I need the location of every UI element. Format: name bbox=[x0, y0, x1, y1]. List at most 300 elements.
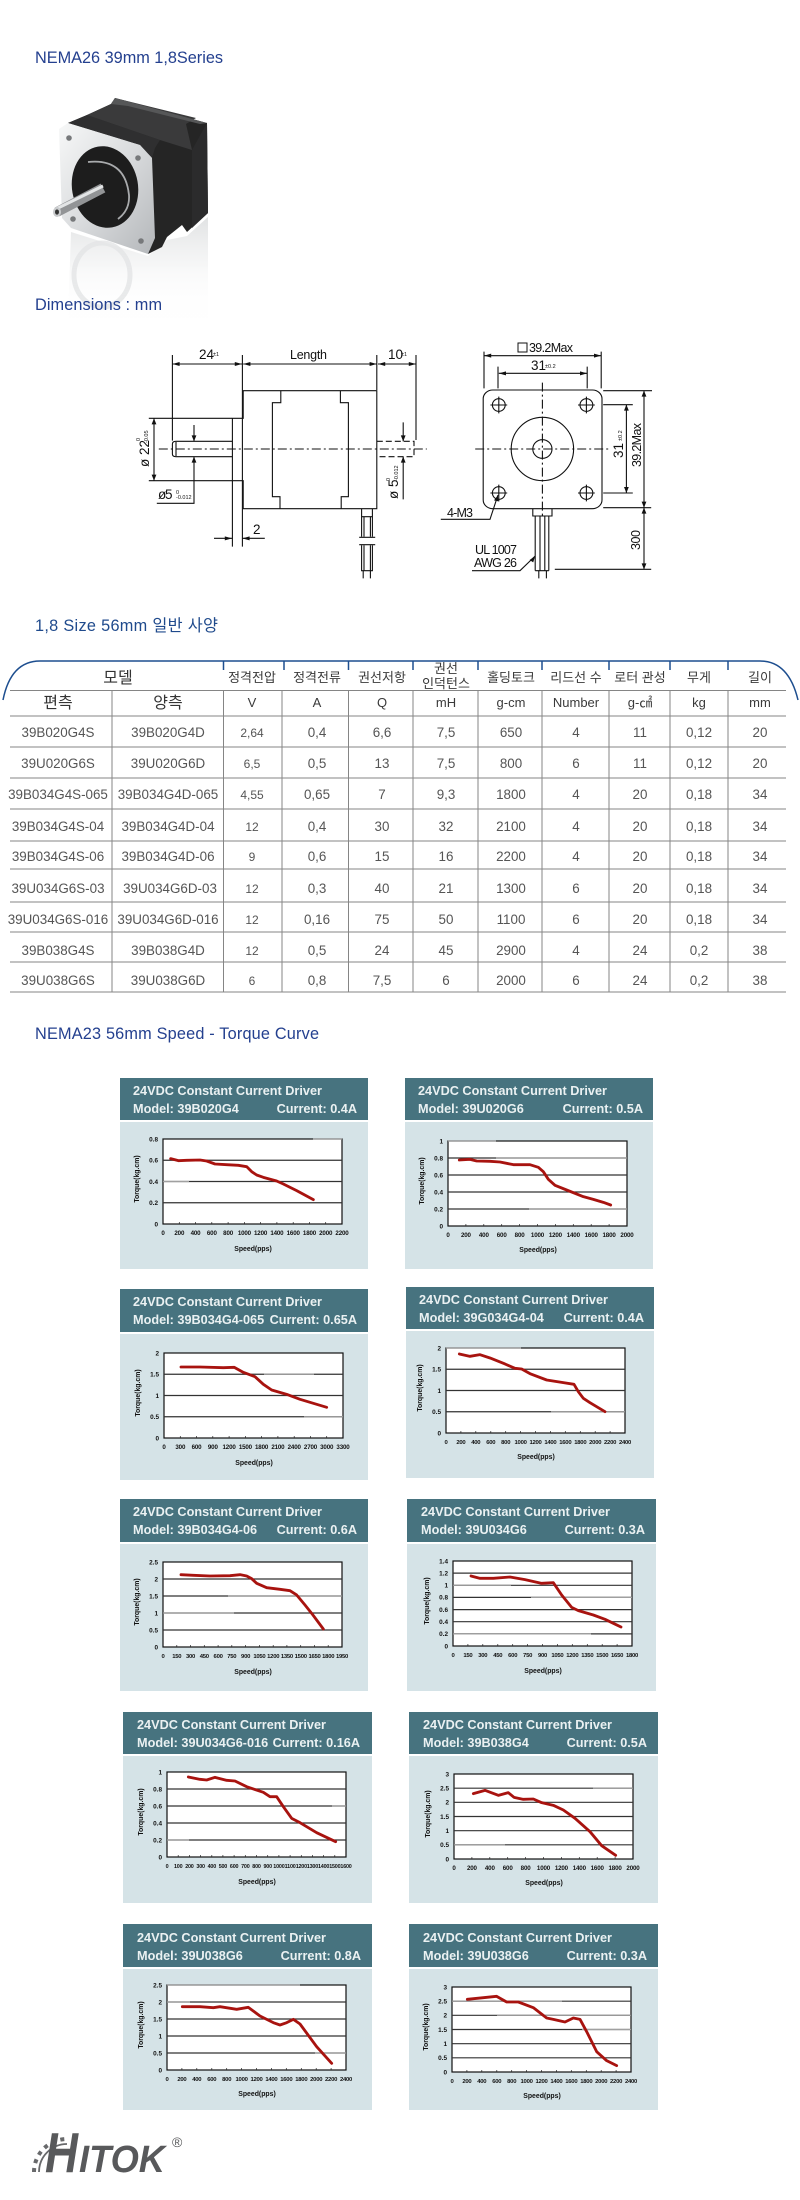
table header: V bbox=[248, 695, 257, 710]
chart axes: 3300 bbox=[336, 1444, 350, 1451]
table header: 정격전류 bbox=[293, 670, 341, 685]
table header: 로터 관성 bbox=[614, 670, 666, 685]
chart axes: 200 bbox=[174, 1230, 185, 1237]
chart axes: 800 bbox=[507, 2079, 517, 2085]
table rows: 2100 bbox=[496, 819, 526, 834]
chart axes: 2 bbox=[437, 1345, 441, 1352]
chart axes bbox=[417, 1345, 632, 1461]
chart axes: Torque(kg.cm) bbox=[134, 1578, 141, 1626]
chart axes: 1000 bbox=[273, 1864, 285, 1870]
table rows: 0,18 bbox=[686, 881, 712, 896]
panel: 39U020G6: 24VDC Constant Current Driver bbox=[418, 1084, 607, 1098]
chart axes: 2200 bbox=[325, 2077, 338, 2083]
chart axes: 0 bbox=[452, 1865, 456, 1872]
table rows: 40 bbox=[375, 881, 389, 896]
table rows: 0,2 bbox=[690, 973, 708, 988]
table rows: 4 bbox=[572, 943, 580, 958]
chart axes: 500 bbox=[219, 1864, 227, 1870]
dimension labels: -0.05 bbox=[144, 430, 150, 443]
chart axes: 300 bbox=[478, 1653, 488, 1659]
chart axes: 1400 bbox=[265, 2077, 278, 2083]
table rows: 2900 bbox=[496, 943, 526, 958]
chart axes: 1000 bbox=[236, 2077, 249, 2083]
table rows: 24 bbox=[633, 943, 648, 958]
chart axes: 0 bbox=[446, 1232, 450, 1239]
dimension labels: 10 bbox=[388, 347, 403, 362]
chart axes: 1050 bbox=[253, 1654, 266, 1660]
table header: 무게 bbox=[687, 670, 711, 685]
table rows: 6 bbox=[572, 912, 580, 927]
panel: 39U034G6-016: 24VDC Constant Current Driver bbox=[137, 1718, 326, 1732]
chart axes: 1000 bbox=[238, 1230, 252, 1237]
table rows: 12 bbox=[245, 820, 259, 834]
chart axes: 1800 bbox=[603, 1232, 616, 1239]
chart axes: 0.5 bbox=[153, 2050, 162, 2057]
panel: 39U020G6: Model: 39U020G6 bbox=[418, 1102, 524, 1116]
chart axes: Speed(pps) bbox=[517, 1454, 555, 1461]
chart axes: 0.8 bbox=[153, 1786, 162, 1793]
heading: product series: NEMA26 39mm 1,8Series bbox=[35, 49, 223, 67]
chart axes: Speed(pps) bbox=[234, 1246, 272, 1253]
chart axes: 1800 bbox=[574, 1440, 587, 1446]
chart axes: 600 bbox=[207, 2077, 217, 2083]
chart axes: 0 bbox=[155, 1435, 159, 1442]
chart axes: 2700 bbox=[304, 1444, 318, 1451]
chart axes: 400 bbox=[471, 1440, 481, 1446]
chart axes: 1 bbox=[437, 1388, 441, 1395]
chart axes: 600 bbox=[503, 1865, 513, 1872]
dimension labels: 24 bbox=[199, 347, 215, 362]
table rows: 34 bbox=[753, 787, 768, 802]
chart axes: 300 bbox=[175, 1444, 186, 1451]
table rows: 6 bbox=[442, 973, 450, 988]
chart axes: 1200 bbox=[549, 1232, 563, 1239]
chart axes: Torque(kg.cm) bbox=[419, 1157, 426, 1205]
chart axes: 600 bbox=[214, 1654, 224, 1660]
panel: 39U038G6 0.3A: 24VDC Constant Current Driver bbox=[423, 1931, 612, 1945]
dimension labels: UL 1007 bbox=[475, 543, 517, 557]
panel: 39U034G6: 24VDC Constant Current Driver bbox=[421, 1505, 610, 1519]
chart axes bbox=[134, 1559, 349, 1676]
chart axes: 1.2 bbox=[439, 1570, 448, 1577]
chart axes: 1200 bbox=[250, 2077, 264, 2083]
chart axes: 2400 bbox=[288, 1444, 301, 1451]
chart axes: Speed(pps) bbox=[235, 1460, 273, 1467]
chart axes: 1800 bbox=[626, 1653, 639, 1659]
table rows: 6,5 bbox=[244, 757, 261, 771]
chart axes: 1.4 bbox=[439, 1558, 448, 1565]
chart axes: 1000 bbox=[521, 2079, 534, 2085]
table rows: 0,3 bbox=[308, 881, 326, 896]
chart axes: Speed(pps) bbox=[238, 1879, 276, 1886]
table header: Q bbox=[377, 695, 387, 710]
chart axes: 2 bbox=[445, 1800, 449, 1807]
table rows: 20 bbox=[753, 725, 767, 740]
chart axes: 0.6 bbox=[434, 1172, 443, 1179]
panel: 39B038G4 bbox=[409, 1712, 658, 1903]
chart axes: 0.2 bbox=[153, 1837, 162, 1844]
panel: 39U038G6 0.8A: 24VDC Constant Current Driver bbox=[137, 1931, 326, 1945]
chart axes: 1800 bbox=[295, 2077, 308, 2083]
table rows: 39B034G4S-04 bbox=[12, 819, 105, 834]
chart axes: 2000 bbox=[595, 2079, 608, 2085]
chart axes: 2.5 bbox=[440, 1786, 449, 1792]
torque curve bbox=[188, 1777, 336, 1842]
chart axes: Torque(kg.cm) bbox=[417, 1364, 424, 1412]
dimension labels: ±0.2 bbox=[618, 430, 624, 441]
panel: 39B020G4: Current: 0.4A bbox=[277, 1102, 357, 1116]
table rows: 1100 bbox=[497, 912, 525, 927]
chart axes: 0.5 bbox=[440, 1842, 449, 1849]
table rows: 4 bbox=[572, 787, 580, 802]
panel: 39B038G4: 24VDC Constant Current Driver bbox=[423, 1718, 612, 1732]
panel: 39B034G4-065: Model: 39B034G4-065 bbox=[133, 1313, 264, 1327]
chart axes: 1950 bbox=[336, 1654, 349, 1660]
chart axes: 0 bbox=[158, 1854, 162, 1861]
chart axes: 0.2 bbox=[149, 1200, 158, 1207]
chart axes: 900 bbox=[241, 1654, 251, 1660]
chart axes: 200 bbox=[461, 1232, 472, 1239]
chart axes: 0 bbox=[445, 1856, 449, 1863]
side and front view linework bbox=[149, 352, 652, 578]
table rows: 38 bbox=[753, 973, 767, 988]
table header: 권선저항 bbox=[358, 670, 406, 685]
chart axes: 0 bbox=[161, 1230, 165, 1237]
table rows: 0,4 bbox=[308, 819, 327, 834]
chart axes: Speed(pps) bbox=[524, 1668, 562, 1675]
panel: 39B038G4: Model: 39B038G4 bbox=[423, 1736, 529, 1750]
chart axes: 900 bbox=[208, 1444, 218, 1451]
dimension labels: 0 bbox=[176, 490, 179, 496]
chart axes: 1.5 bbox=[438, 2027, 447, 2034]
chart axes: 2000 bbox=[589, 1440, 602, 1446]
torque curve bbox=[171, 1159, 313, 1200]
table header bbox=[43, 661, 772, 712]
table rows bbox=[8, 725, 768, 988]
dimension labels: 31 bbox=[611, 443, 626, 458]
table rows: 11 bbox=[633, 756, 647, 771]
table rows: 0,16 bbox=[304, 912, 330, 927]
heading: speed torque curve: NEMA23 56mm Speed - Torque Curve bbox=[35, 1025, 319, 1043]
chart axes: 0 bbox=[162, 1444, 166, 1451]
dimension labels: Length bbox=[290, 348, 327, 362]
torque curve bbox=[459, 1354, 605, 1412]
chart axes: 1100 bbox=[285, 1864, 296, 1870]
chart axes: 150 bbox=[463, 1653, 473, 1659]
table rows: 21 bbox=[439, 881, 453, 896]
chart axes: 0 bbox=[165, 2077, 169, 2083]
chart axes: 1 bbox=[154, 1610, 158, 1617]
chart axes: 400 bbox=[485, 1865, 495, 1872]
torque curve bbox=[181, 1367, 327, 1407]
chart axes: 1800 bbox=[609, 1865, 622, 1872]
table rows: 20 bbox=[753, 756, 767, 771]
chart axes: Torque(kg.cm) bbox=[138, 2001, 145, 2049]
panel: 39B034G4-065: Current: 0.65A bbox=[270, 1313, 357, 1327]
chart axes: 0 bbox=[154, 1221, 158, 1228]
chart axes: 1.5 bbox=[432, 1366, 441, 1374]
panel: 39G034G4-04: Current: 0.4A bbox=[564, 1311, 644, 1325]
chart axes: 1350 bbox=[281, 1654, 294, 1660]
torque curve bbox=[182, 2007, 332, 2063]
chart axes: 0.4 bbox=[149, 1179, 158, 1186]
chart axes: 1600 bbox=[585, 1232, 598, 1239]
panel: 39U034G6-016: Current: 0.16A bbox=[273, 1736, 360, 1750]
chart axes: 2400 bbox=[340, 2077, 353, 2083]
table rows: 0,18 bbox=[686, 912, 712, 927]
chart axes: 1400 bbox=[573, 1865, 587, 1872]
chart axes: 750 bbox=[523, 1653, 533, 1659]
panel: 39U020G6: Current: 0.5A bbox=[563, 1102, 643, 1116]
chart axes: 1800 bbox=[580, 2079, 593, 2085]
chart axes: 0 bbox=[439, 1223, 443, 1230]
table rows: 20 bbox=[633, 819, 647, 834]
panel: 39U034G6: Current: 0.3A bbox=[565, 1523, 645, 1537]
chart axes bbox=[134, 1136, 349, 1253]
chart axes: 400 bbox=[208, 1864, 216, 1870]
chart axes: 0.6 bbox=[149, 1158, 158, 1164]
chart axes: 0.2 bbox=[434, 1206, 443, 1213]
table rows: 4 bbox=[572, 849, 580, 864]
table rows: 39B034G4S-06 bbox=[12, 849, 104, 864]
table header: 길이 bbox=[748, 670, 772, 685]
chart axes: 1 bbox=[439, 1138, 443, 1145]
table rows: 39U038G6D bbox=[131, 973, 206, 988]
dimension labels: AWG 26 bbox=[474, 556, 517, 570]
dimension labels: 39.2Max bbox=[630, 422, 644, 467]
chart axes: 1650 bbox=[308, 1654, 322, 1660]
chart axes: 0 bbox=[444, 1643, 448, 1650]
table rows: 0,18 bbox=[686, 819, 712, 834]
table rows: 24 bbox=[375, 943, 390, 958]
chart axes: 3000 bbox=[320, 1444, 334, 1451]
table rows: 0,4 bbox=[308, 725, 327, 740]
chart axes: 1050 bbox=[551, 1653, 564, 1659]
chart axes: 1200 bbox=[566, 1653, 579, 1659]
chart axes: 0.5 bbox=[149, 1627, 158, 1634]
chart axes: 0.5 bbox=[150, 1414, 159, 1421]
chart axes bbox=[425, 1771, 640, 1887]
panel: 39U034G6-016: Model: 39U034G6-016 bbox=[137, 1736, 268, 1750]
chart axes: 1600 bbox=[340, 1864, 352, 1870]
table rows: 39B038G4D bbox=[131, 943, 205, 958]
chart axes: 1200 bbox=[296, 1864, 307, 1870]
table header: 권선 bbox=[434, 661, 458, 676]
chart axes: 2000 bbox=[620, 1232, 634, 1239]
chart axes: 1650 bbox=[611, 1653, 624, 1659]
chart axes: 2000 bbox=[626, 1865, 640, 1872]
torque curve bbox=[181, 1575, 323, 1629]
chart axes: 1400 bbox=[270, 1230, 284, 1237]
table rows: 6 bbox=[572, 881, 580, 896]
chart axes: 0 bbox=[166, 1864, 169, 1870]
table rows: 34 bbox=[753, 912, 768, 927]
chart axes: 0 bbox=[451, 1653, 455, 1659]
chart axes: 0 bbox=[161, 1654, 165, 1660]
table header: mm bbox=[749, 695, 771, 710]
table rows: 45 bbox=[439, 943, 453, 958]
chart axes bbox=[424, 1558, 639, 1675]
chart axes: 1200 bbox=[223, 1444, 236, 1451]
chart axes: 0.5 bbox=[438, 2055, 447, 2062]
chart axes: 2200 bbox=[604, 1440, 617, 1446]
dimension labels: 2 bbox=[253, 522, 261, 537]
table rows: 39B034G4S-065 bbox=[8, 787, 108, 802]
table rows: 32 bbox=[439, 819, 453, 834]
table header: 인덕턴스 bbox=[422, 676, 470, 691]
chart axes: 2 bbox=[443, 2013, 447, 2020]
chart axes: 3 bbox=[445, 1771, 449, 1778]
chart axes: 200 bbox=[177, 2077, 187, 2083]
chart axes: 1600 bbox=[287, 1230, 300, 1237]
torque curve bbox=[467, 1996, 617, 2066]
chart axes: 450 bbox=[200, 1654, 210, 1660]
chart axes bbox=[135, 1350, 350, 1467]
chart axes: 1400 bbox=[567, 1232, 581, 1239]
panel: 39U020G6 bbox=[405, 1078, 653, 1269]
table rows: 39U034G6D-03 bbox=[123, 881, 217, 896]
table rows: 13 bbox=[375, 756, 389, 771]
table rows: 24 bbox=[633, 973, 648, 988]
chart axes: 0.5 bbox=[432, 1409, 441, 1416]
chart axes: 400 bbox=[191, 1230, 201, 1237]
chart axes: Torque(kg.cm) bbox=[423, 2003, 430, 2051]
chart axes: 1800 bbox=[322, 1654, 335, 1660]
table rows: 12 bbox=[245, 944, 259, 958]
panel: 39U034G6 bbox=[407, 1499, 656, 1691]
chart axes: 0.8 bbox=[149, 1136, 158, 1143]
table rows: 20 bbox=[633, 881, 647, 896]
chart axes: 800 bbox=[252, 1864, 261, 1870]
chart axes: 1200 bbox=[267, 1654, 280, 1660]
chart axes: 0 bbox=[443, 2069, 447, 2076]
table grid bbox=[10, 690, 786, 992]
table rows: 6,6 bbox=[373, 725, 391, 740]
logo: HITOK: ITOK bbox=[79, 2139, 167, 2181]
specification table bbox=[3, 661, 798, 992]
chart axes: Torque(kg.cm) bbox=[134, 1155, 141, 1203]
chart axes: 800 bbox=[222, 2077, 232, 2083]
chart axes: 2 bbox=[158, 1999, 162, 2006]
chart axes: 2.5 bbox=[153, 1982, 162, 1989]
table rows: 0,18 bbox=[686, 849, 712, 864]
table rows: 39B034G4D-06 bbox=[121, 849, 215, 864]
table rows: 7,5 bbox=[437, 725, 455, 740]
chart axes: 700 bbox=[241, 1864, 250, 1870]
chart axes: 0.4 bbox=[434, 1189, 443, 1196]
table rows: 39U038G6S bbox=[21, 973, 95, 988]
chart axes: 0 bbox=[158, 2067, 162, 2074]
panel: 39U038G6 0.8A: Model: 39U038G6 bbox=[137, 1949, 243, 1963]
panel: 39G034G4-04: Model: 39G034G4-04 bbox=[419, 1311, 544, 1325]
chart axes: 1000 bbox=[537, 1865, 551, 1872]
table rows: 0,2 bbox=[690, 943, 708, 958]
table rows: 39B034G4D-04 bbox=[121, 819, 215, 834]
chart axes: 2 bbox=[155, 1350, 159, 1357]
chart axes: 0.8 bbox=[434, 1155, 443, 1162]
table header: g-㎠ bbox=[628, 695, 652, 710]
table rows: 1800 bbox=[496, 787, 526, 802]
chart axes: 1300 bbox=[307, 1864, 318, 1870]
chart axes: 1 bbox=[444, 1583, 448, 1590]
chart axes: 600 bbox=[207, 1230, 217, 1237]
chart axes: 2200 bbox=[335, 1230, 349, 1237]
chart axes: 1600 bbox=[565, 2079, 578, 2085]
chart axes: 0 bbox=[444, 1440, 448, 1446]
chart axes: 0.4 bbox=[153, 1820, 162, 1827]
panel: 39B034G4-06: 24VDC Constant Current Driver bbox=[133, 1505, 322, 1519]
chart axes: 200 bbox=[456, 1440, 466, 1446]
dimension labels: ±1 bbox=[401, 352, 407, 358]
chart axes: 2100 bbox=[271, 1444, 285, 1451]
table rows: 39U034G6D-016 bbox=[117, 912, 219, 927]
chart axes: 750 bbox=[227, 1654, 237, 1660]
panel: 39U038G6 0.3A: Current: 0.3A bbox=[567, 1949, 647, 1963]
chart axes: Torque(kg.cm) bbox=[424, 1577, 431, 1625]
chart axes bbox=[419, 1138, 634, 1254]
chart axes: 1200 bbox=[529, 1440, 543, 1446]
table rows: 7 bbox=[378, 787, 386, 802]
chart axes: 0.6 bbox=[439, 1607, 448, 1614]
table rows: 34 bbox=[753, 881, 768, 896]
heading: general specifications: 1,8 Size 56mm 일반 사양 bbox=[35, 617, 218, 635]
table rounded top border bbox=[3, 661, 798, 700]
chart axes: 1350 bbox=[581, 1653, 594, 1659]
chart axes: Torque(kg.cm) bbox=[425, 1790, 432, 1838]
panel: 39B034G4-06: Model: 39B034G4-06 bbox=[133, 1523, 257, 1537]
product photo: stepper motor bbox=[53, 98, 208, 318]
torque curve bbox=[471, 1576, 621, 1627]
dimension labels: 4-M3 bbox=[447, 506, 473, 520]
table header: mH bbox=[436, 695, 456, 710]
chart axes: 2 bbox=[154, 1576, 158, 1583]
table rows: 650 bbox=[500, 725, 522, 740]
chart axes: 0.2 bbox=[439, 1631, 448, 1638]
table rows: 7,5 bbox=[373, 973, 391, 988]
chart axes: 1800 bbox=[303, 1230, 317, 1237]
chart axes: 400 bbox=[477, 2079, 487, 2085]
table rows: 0,65 bbox=[304, 787, 330, 802]
chart axes: 2.5 bbox=[438, 1998, 447, 2006]
chart axes: 1000 bbox=[531, 1232, 545, 1239]
chart axes: Torque(kg.cm) bbox=[135, 1369, 142, 1417]
chart axes: 450 bbox=[493, 1653, 503, 1659]
chart axes: 800 bbox=[515, 1232, 525, 1239]
chart axes: 400 bbox=[192, 2077, 202, 2083]
dimension labels: -0.012 bbox=[394, 465, 400, 481]
chart axes: 2400 bbox=[625, 2079, 638, 2085]
chart axes: 1400 bbox=[318, 1864, 329, 1870]
chart axes: 0.8 bbox=[439, 1595, 448, 1602]
dimension labels: 0 bbox=[136, 438, 142, 441]
table rows: 34 bbox=[753, 849, 768, 864]
table rows: 0,8 bbox=[308, 973, 326, 988]
table rows: 0,12 bbox=[686, 756, 712, 771]
chart axes: 1200 bbox=[555, 1865, 569, 1872]
chart axes: 1600 bbox=[591, 1865, 604, 1872]
chart axes: 0 bbox=[437, 1430, 441, 1437]
table rows: 6 bbox=[572, 973, 580, 988]
chart axes: 1500 bbox=[239, 1444, 253, 1451]
chart axes: 1.5 bbox=[440, 1814, 449, 1821]
table header: 양측 bbox=[153, 694, 183, 712]
table rows: 2000 bbox=[496, 973, 526, 988]
table rows: 1300 bbox=[496, 881, 526, 896]
table header: Number bbox=[553, 695, 600, 710]
chart axes: 900 bbox=[263, 1864, 272, 1870]
table header: 편측 bbox=[43, 694, 73, 712]
panel: 39G034G4-04: 24VDC Constant Current Driver bbox=[419, 1293, 608, 1307]
